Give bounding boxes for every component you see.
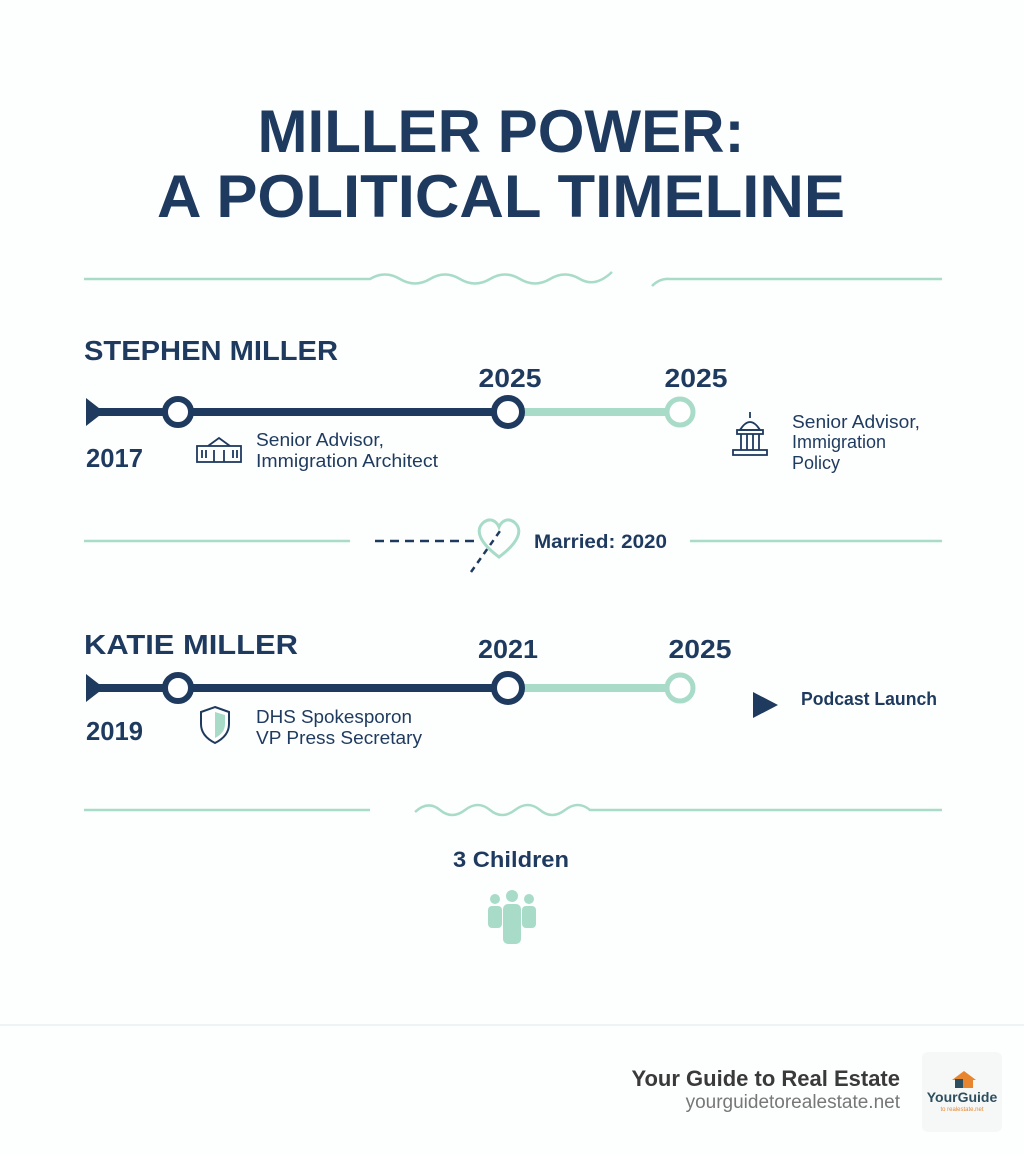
footer <box>0 1025 1024 1132</box>
logo: to realestate.net <box>940 1107 984 1113</box>
icon: play <box>753 692 778 718</box>
text: stephen 2025 role: Immigration <box>792 432 886 452</box>
logo <box>922 1052 1002 1132</box>
text: stephen role: Immigration Architect <box>256 451 438 471</box>
text: podcast: Podcast Launch <box>801 689 937 709</box>
icon: capitol <box>733 412 767 455</box>
text: stephen role: Senior Advisor, <box>256 430 384 450</box>
years: 2025 <box>664 363 728 393</box>
text: stephen role <box>256 430 438 471</box>
title <box>157 98 845 230</box>
footer: yourguidetorealestate.net <box>686 1092 901 1113</box>
name: STEPHEN MILLER <box>84 335 338 366</box>
text: stephen 2025 role <box>792 412 920 473</box>
marriage divider <box>84 520 942 572</box>
icon: shield <box>201 707 229 743</box>
section: Stephen Miller <box>84 335 920 473</box>
title: MILLER POWER: <box>258 98 744 165</box>
logo: YourGuide <box>927 1089 997 1105</box>
years: 2025 <box>478 363 542 393</box>
section: Katie Miller <box>84 629 937 748</box>
text: katie role: DHS Spokesporon <box>256 707 412 727</box>
name: KATIE MILLER <box>84 629 298 660</box>
bottom divider <box>84 805 942 815</box>
timeline <box>86 674 693 702</box>
years <box>86 634 732 746</box>
years: 2025 <box>668 634 732 664</box>
footer: Your Guide to Real Estate <box>631 1066 900 1091</box>
years: 2017 <box>86 443 143 473</box>
years: 2021 <box>478 634 538 664</box>
text: stephen 2025 role: Senior Advisor, <box>792 412 920 432</box>
text: stephen 2025 role: Policy <box>792 453 840 473</box>
text: katie role: VP Press Secretary <box>256 728 422 748</box>
text: married: Married: 2020 <box>534 532 667 553</box>
years <box>86 363 728 473</box>
icon: heart <box>479 520 519 557</box>
title: A POLITICAL TIMELINE <box>157 163 845 230</box>
timeline <box>86 398 693 426</box>
years: 2019 <box>86 716 143 746</box>
top divider <box>84 272 942 286</box>
text: children: 3 Children <box>453 847 569 872</box>
icon: white house <box>197 438 241 462</box>
icon: family <box>488 890 536 944</box>
text: katie role <box>256 707 422 748</box>
